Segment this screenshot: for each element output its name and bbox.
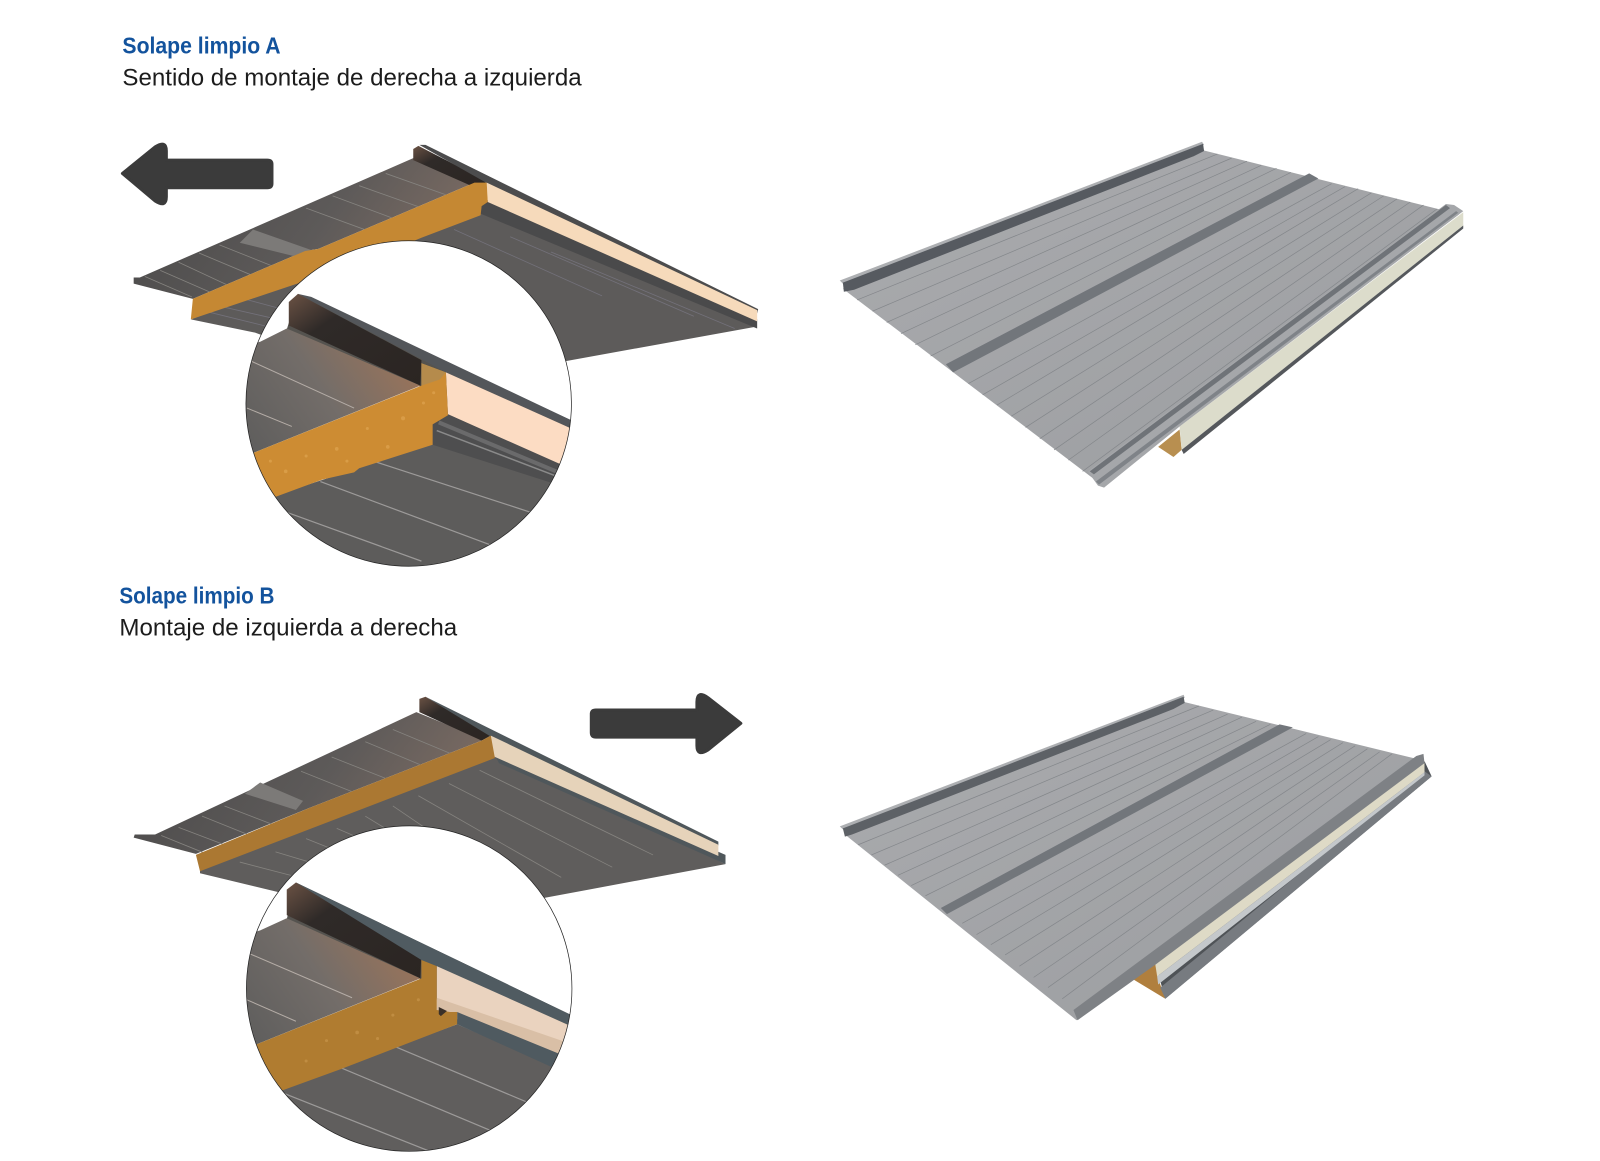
foam — [243, 363, 448, 500]
top strip — [296, 882, 571, 1026]
channel — [289, 294, 421, 386]
panel A: section view — [134, 145, 758, 390]
subtitle: montaje derecha a izquierda: Sentido de montaje de derecha a izquierda — [122, 65, 582, 92]
base — [287, 294, 570, 444]
dark base of lower rib — [1155, 761, 1432, 999]
cream insulation — [1180, 212, 1463, 450]
top strip — [298, 294, 573, 430]
top rib — [840, 695, 1185, 829]
base — [287, 882, 570, 1025]
foam core — [191, 183, 488, 319]
outer rib — [1160, 771, 1432, 999]
upper surface — [240, 329, 420, 459]
cream insulation — [446, 372, 573, 468]
upper surface — [240, 918, 420, 1051]
middle rib — [941, 724, 1293, 914]
sheet — [843, 150, 1459, 484]
channel — [287, 882, 421, 978]
channel — [419, 697, 491, 741]
grooves — [857, 154, 1437, 471]
seam bump — [245, 783, 303, 810]
panel A: roof sheet 3D — [840, 142, 1463, 488]
lower rib — [480, 200, 757, 329]
middle rib — [946, 173, 1318, 372]
lower surface — [200, 753, 726, 923]
lower surface — [191, 209, 757, 390]
lower surface — [276, 444, 550, 566]
arrow: left — [122, 144, 272, 204]
circle detail B — [246, 826, 572, 1152]
right edge rib — [1073, 754, 1424, 1020]
panel B: roof sheet 3D — [840, 695, 1432, 1020]
pale strip — [1157, 772, 1424, 985]
circle detail A — [246, 240, 572, 567]
lower surface — [282, 1024, 552, 1151]
subtitle: montaje izquierda a derecha: Montaje de izquierda a derecha — [119, 615, 458, 642]
top strip — [426, 697, 718, 846]
grey strip — [457, 1012, 564, 1068]
panel B: section view — [134, 697, 726, 923]
lower strip — [495, 755, 726, 864]
heading: Solape limpio A: Solape limpio A — [122, 33, 281, 59]
grooves — [858, 706, 1392, 999]
cream insulation — [1155, 761, 1424, 976]
arrow: right — [591, 695, 741, 753]
right rib — [1088, 204, 1463, 488]
heading: Solape limpio B: Solape limpio B — [119, 582, 274, 608]
under strip — [1182, 225, 1463, 454]
cream insulation — [491, 736, 718, 856]
top strip — [419, 145, 758, 313]
seam bump — [240, 230, 311, 258]
cream insulation — [487, 183, 757, 321]
upper surface with standing seam — [134, 712, 482, 854]
foam core — [196, 736, 495, 871]
foam — [1132, 963, 1165, 999]
cream insulation — [436, 966, 568, 1041]
rib — [433, 414, 567, 484]
foam — [248, 960, 457, 1094]
upper surface with standing seam — [134, 158, 476, 299]
top rib — [840, 142, 1204, 284]
dark channel — [413, 146, 488, 188]
foam — [1158, 430, 1182, 457]
sheet — [845, 702, 1421, 1020]
